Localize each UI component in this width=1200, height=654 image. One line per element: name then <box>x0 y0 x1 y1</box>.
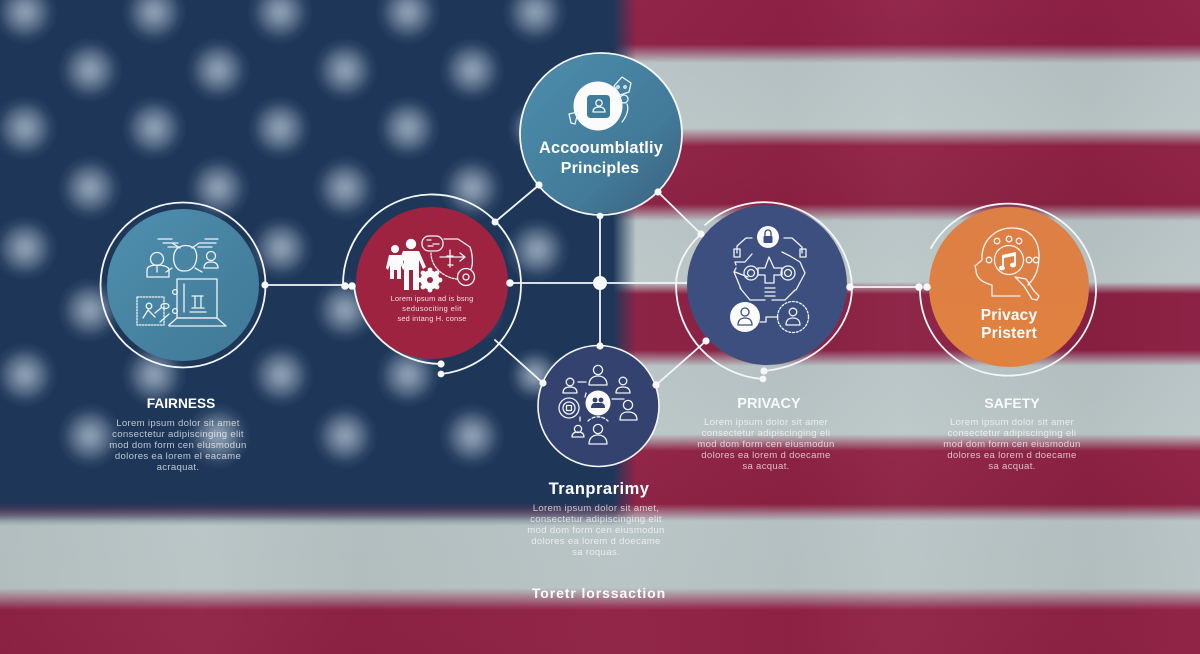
icon: connected people network <box>559 365 637 444</box>
text block: fairness: FAIRNESS <box>147 396 215 411</box>
icon: accountability badge <box>569 77 631 130</box>
text block: privacy: dolores ea lorem d doecame <box>701 450 831 461</box>
central hub node <box>593 276 607 290</box>
panel: safety circle <box>915 204 1096 376</box>
text block: transparency: Tranprarimy <box>549 480 650 498</box>
text block: fairness: mod dom form cen elusmodun <box>109 440 247 451</box>
icon: privacy lock and users <box>730 226 808 332</box>
text: red circle caption: sed intang H. conse <box>397 314 467 323</box>
icon: fairness people and gavel <box>137 239 226 326</box>
text: red circle caption: Lorem ipsum ad is bsng <box>391 294 473 303</box>
text block: privacy: PRIVACY <box>737 396 801 412</box>
text block: fairness: dolores ea lorem el eacame <box>115 451 241 462</box>
text: red circle caption <box>391 294 473 323</box>
heading: accountability principles <box>539 139 663 177</box>
text block: transparency: consectetur adipiscinging elit <box>530 514 662 525</box>
text block: privacy: mod dom form cen eiusmodun <box>697 439 835 450</box>
text: red circle caption: sedusociting elit <box>402 304 462 313</box>
footer label: Toretr lorssaction <box>532 585 666 601</box>
text block: safety: SAFETY <box>984 395 1040 411</box>
text block: safety <box>943 395 1081 472</box>
heading: privacy pristert: Privacy <box>981 307 1037 324</box>
text block: privacy: sa acquat. <box>742 461 790 472</box>
panel: red circle <box>341 194 521 377</box>
text block: fairness: acraquat. <box>157 462 199 473</box>
icon: people, gear and process <box>386 236 474 292</box>
text block: transparency: sa roquas. <box>572 547 620 558</box>
text block: transparency: Lorem ipsum dolor sit amet, <box>533 503 659 514</box>
text block: safety: sa acquat. <box>988 461 1036 472</box>
text block: privacy: Lorem ipsum dolor sit amer <box>704 417 829 428</box>
heading: privacy pristert: Pristert <box>981 325 1037 342</box>
text block: transparency: dolores ea lorem d doecame <box>531 536 661 547</box>
text block: fairness: Lorem ipsum dolor sit amet <box>116 418 240 429</box>
text block: fairness: consectetur adipiscinging elit <box>112 429 244 440</box>
text block: privacy: consectetur adipiscinging eli <box>702 428 830 439</box>
text block: safety: consectetur adipiscinging eli <box>948 428 1076 439</box>
text block: privacy <box>697 396 835 472</box>
connector lines <box>265 185 919 385</box>
heading: accountability principles: Principles <box>561 160 639 177</box>
heading: accountability principles: Accooumblatliy <box>539 139 663 157</box>
text block: safety: Lorem ipsum dolor sit amer <box>950 417 1075 428</box>
text block: safety: dolores ea lorem d doecame <box>947 450 1077 461</box>
icon: head with music note <box>975 228 1039 300</box>
panel: transparency circle <box>538 342 660 466</box>
panel: privacy circle <box>676 202 854 382</box>
heading: privacy pristert <box>981 307 1037 342</box>
text block: transparency: mod dom form cen eiusmodun <box>527 525 665 536</box>
panel: accountability circle <box>520 53 682 219</box>
text block: transparency <box>527 480 665 558</box>
text block: safety: mod dom form cen eiusmodun <box>943 439 1081 450</box>
panel: fairness circle <box>100 202 269 368</box>
text block: fairness <box>109 396 247 473</box>
